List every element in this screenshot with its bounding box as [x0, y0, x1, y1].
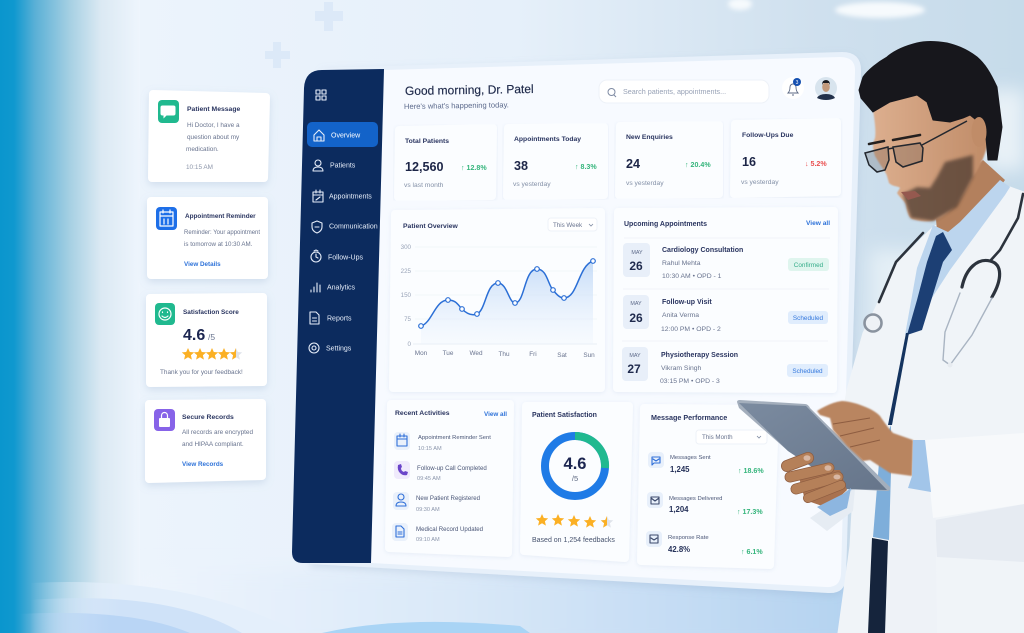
sidebar [292, 69, 384, 563]
panel: patient message: 10:15 AM [186, 164, 213, 171]
appointment row 1: 10:30 AM • OPD - 1 [662, 273, 722, 280]
panel: appointment reminder: Reminder: Your appointment [184, 230, 260, 236]
doctor illustration [737, 42, 1024, 633]
stat card: appointments today [507, 127, 604, 196]
panel: satisfaction score: /5 [208, 332, 215, 342]
shirt collar [905, 180, 1010, 335]
hair [859, 42, 1002, 160]
stat card: appointments today: ↑ 8.3% [575, 163, 597, 171]
panel: patient message: medication. [186, 146, 219, 153]
left shirt cuff [817, 488, 851, 516]
stat card: appointments today: vs yesterday [513, 181, 551, 188]
chart axis labels: 300 [401, 244, 412, 251]
nav appointments [313, 190, 372, 202]
tablet [737, 400, 890, 491]
chart axis labels: 75 [404, 316, 412, 323]
metric: messages delivered: 1,204 [669, 505, 689, 514]
stat card: total patients: ↑ 12.8% [461, 164, 487, 172]
panel: recent activities [389, 404, 510, 553]
tie [907, 232, 952, 335]
metric: messages sent [648, 452, 764, 475]
panel: satisfaction score [150, 297, 263, 383]
icon: lock [159, 418, 170, 427]
appointment row 2: 26 [629, 311, 643, 325]
nav reports: Reports [327, 316, 352, 322]
icon: chat bubble [160, 106, 176, 118]
chart axis labels: Thu [498, 351, 510, 358]
appointment row 1 [623, 243, 829, 280]
nav analytics [311, 283, 356, 292]
panel: recent activities: View all [484, 411, 507, 418]
header greeting: Good morning, Dr. Patel [405, 82, 534, 98]
panel: patient message: question about my [187, 134, 240, 141]
stat card: follow-ups due [734, 122, 837, 194]
metric: response rate [646, 531, 763, 556]
appointment row 3: 27 [627, 362, 641, 376]
icon: notification bell [782, 77, 804, 99]
right hand [817, 401, 931, 492]
chart axis labels: 225 [401, 268, 412, 275]
panel: appointment reminder: View Details [184, 261, 221, 268]
panel: patient overview chart: Patient Overview [403, 223, 458, 230]
activity 4: 09:10 AM [416, 537, 440, 543]
panel: upcoming appointments: Upcoming Appointments [624, 221, 707, 228]
stethoscope [864, 194, 1023, 368]
icon: grid logo [316, 90, 326, 100]
beard [903, 155, 973, 221]
eyebrows [869, 135, 920, 144]
dropdown: this week [548, 218, 597, 231]
ear [972, 117, 986, 147]
appointment row 1: Cardiology Consultation [662, 247, 743, 254]
dropdown: this month: This Month [702, 434, 733, 441]
panel: secure records: Secure Records [182, 414, 234, 421]
panel: message performance [641, 408, 775, 565]
metric: messages sent: 1,245 [670, 465, 690, 474]
stat card: total patients: 12,560 [405, 160, 444, 174]
panel: patient satisfaction [524, 406, 629, 558]
activity 1 [394, 432, 491, 452]
appointment row 1: 26 [629, 259, 643, 273]
chart axis labels: Sat [557, 352, 567, 359]
appointment row 2 [623, 295, 828, 333]
panel: secure records: and HIPAA compliant. [182, 441, 244, 448]
activity 2: Follow-up Call Completed [417, 465, 487, 472]
stat card: new enquiries: vs yesterday [626, 180, 664, 187]
metric: response rate: ↑ 6.1% [741, 548, 763, 556]
appointment row 2: Anita Verma [662, 312, 699, 319]
stat card: appointments today: Appointments Today [514, 136, 581, 143]
stat card: total patients: vs last month [404, 182, 444, 189]
nav appointments: Appointments [329, 194, 372, 200]
dropdown: this week: This Week [553, 222, 583, 229]
appointment row 2: MAY [630, 301, 642, 307]
panel: recent activities: Recent Activities [395, 410, 450, 417]
metric: response rate: Response Rate [668, 535, 709, 541]
left sleeve [810, 488, 855, 531]
nav settings: Settings [326, 346, 352, 352]
stat card: follow-ups due: vs yesterday [741, 179, 779, 186]
activity 2 [394, 461, 487, 482]
search box [599, 80, 769, 103]
nav follow-ups: Follow-Ups [328, 254, 364, 262]
stat card: appointments today: 38 [514, 159, 528, 173]
appointment row 1: MAY [631, 250, 643, 256]
nav settings [309, 343, 352, 353]
donut chart: 4.6 [564, 455, 586, 473]
stat card: new enquiries [619, 125, 719, 195]
metric: messages sent: Messages Sent [670, 455, 711, 461]
stat card: total patients: Total Patients [405, 138, 449, 145]
nav analytics: Analytics [327, 284, 356, 292]
activity 2: 09:45 AM [417, 476, 441, 482]
chart axis labels: Wed [469, 350, 483, 357]
panel: appointment reminder: is tomorrow at 10:30 AM. [184, 241, 253, 248]
metric: messages sent: ↑ 18.6% [738, 467, 764, 475]
nav patients [313, 160, 356, 171]
panel: appointment reminder: Appointment Reminder [185, 213, 256, 220]
chart axis labels: Mon [415, 350, 428, 357]
lab coat [838, 187, 1024, 633]
metric: messages delivered: Messages Delivered [669, 496, 722, 502]
appointment row 3: Vikram Singh [661, 365, 702, 372]
neck [935, 160, 1005, 250]
header greeting [404, 82, 534, 111]
panel: satisfaction score: Thank you for your feedback! [160, 369, 243, 376]
stat card: follow-ups due: Follow-Ups Due [742, 132, 794, 139]
nav overview active: Overview [331, 132, 361, 140]
chart axis labels: Tue [443, 350, 454, 357]
stat card: total patients [398, 128, 493, 197]
appointment row 2: 12:00 PM • OPD - 2 [661, 326, 721, 333]
rating stars [182, 348, 242, 360]
metric: response rate: 42.8% [668, 545, 690, 554]
metric: messages delivered: ↑ 17.3% [737, 508, 763, 516]
stat card: follow-ups due: ↓ 5.2% [805, 160, 827, 168]
panel: patient message [152, 94, 266, 178]
appointment row 3: MAY [629, 353, 641, 359]
appointment row 2: Follow-up Visit [662, 299, 712, 306]
panel: appointment reminder [151, 201, 264, 275]
metric: messages delivered [647, 492, 763, 516]
appointment row 3: Physiotherapy Session [661, 352, 738, 359]
panel: patient message: Patient Message [187, 106, 240, 113]
panel: message performance: Message Performance [651, 413, 727, 422]
dropdown: this month [696, 430, 767, 444]
rating stars [536, 514, 613, 528]
chart axis labels: 0 [408, 341, 412, 348]
activity 4: Medical Record Updated [416, 526, 483, 533]
panel: upcoming appointments: View all [806, 220, 830, 227]
stat card: new enquiries: ↑ 20.4% [685, 161, 711, 169]
line chart [419, 259, 595, 344]
coat shading [935, 504, 1024, 562]
nav follow-ups [311, 250, 364, 262]
head [873, 85, 988, 221]
appointment row 2: Scheduled [793, 315, 824, 322]
chart axis labels: Fri [529, 351, 537, 358]
nav communication: Communication [329, 224, 378, 230]
activity 3: 09:30 AM [416, 507, 440, 513]
activity 4 [392, 523, 483, 543]
appointment row 3: 03:15 PM • OPD - 3 [660, 378, 720, 385]
search box: Search patients, appointments... [623, 87, 726, 96]
icon: plus decorations [265, 2, 343, 68]
donut chart [545, 436, 605, 496]
nav communication [312, 221, 378, 233]
chart axis labels: 150 [401, 292, 412, 299]
icon: notification bell: 3 [796, 80, 799, 86]
panel: satisfaction score: Satisfaction Score [183, 309, 239, 316]
appointment row 1: Rahul Mehta [662, 260, 701, 267]
panel: patient overview chart [393, 212, 601, 388]
panel: patient satisfaction: Patient Satisfaction [532, 412, 597, 419]
activity 3: New Patient Registered [416, 495, 480, 502]
nav reports [310, 312, 352, 324]
panel: satisfaction score: 4.6 [183, 327, 205, 344]
stat card: new enquiries: New Enquiries [626, 134, 673, 141]
stat card: follow-ups due: 16 [742, 155, 756, 169]
chart axis labels: Sun [583, 352, 595, 359]
glasses [865, 121, 967, 172]
icon: calendar [160, 210, 173, 226]
panel: secure records: View Records [182, 461, 224, 468]
nav patients: Patients [330, 162, 356, 170]
activity 1: 10:15 AM [418, 446, 442, 452]
nav overview active [307, 122, 378, 147]
panel: secure records: All records are encrypted [182, 429, 253, 436]
appointment row 1: Confirmed [794, 262, 824, 269]
donut chart: /5 [572, 474, 578, 483]
panel: dashboard glass [310, 52, 861, 593]
chart axis labels [401, 244, 595, 359]
panel: secure records [149, 403, 262, 479]
avatar [815, 77, 837, 100]
appointment row 3 [622, 347, 828, 385]
panel: patient satisfaction: Based on 1,254 feedbacks [532, 537, 615, 544]
appointment row 3: Scheduled [792, 368, 823, 375]
left hand [787, 455, 851, 516]
stat card: new enquiries: 24 [626, 157, 640, 171]
header greeting: Here's what's happening today. [404, 100, 509, 111]
activity 1: Appointment Reminder Sent [418, 435, 491, 441]
icon: smile [159, 308, 171, 320]
right shirt cuff [908, 440, 931, 492]
panel: patient message: Hi Doctor, I have a [187, 122, 240, 129]
panel: upcoming appointments [617, 211, 834, 389]
shirt and trousers [873, 425, 891, 540]
activity 3 [393, 492, 480, 513]
